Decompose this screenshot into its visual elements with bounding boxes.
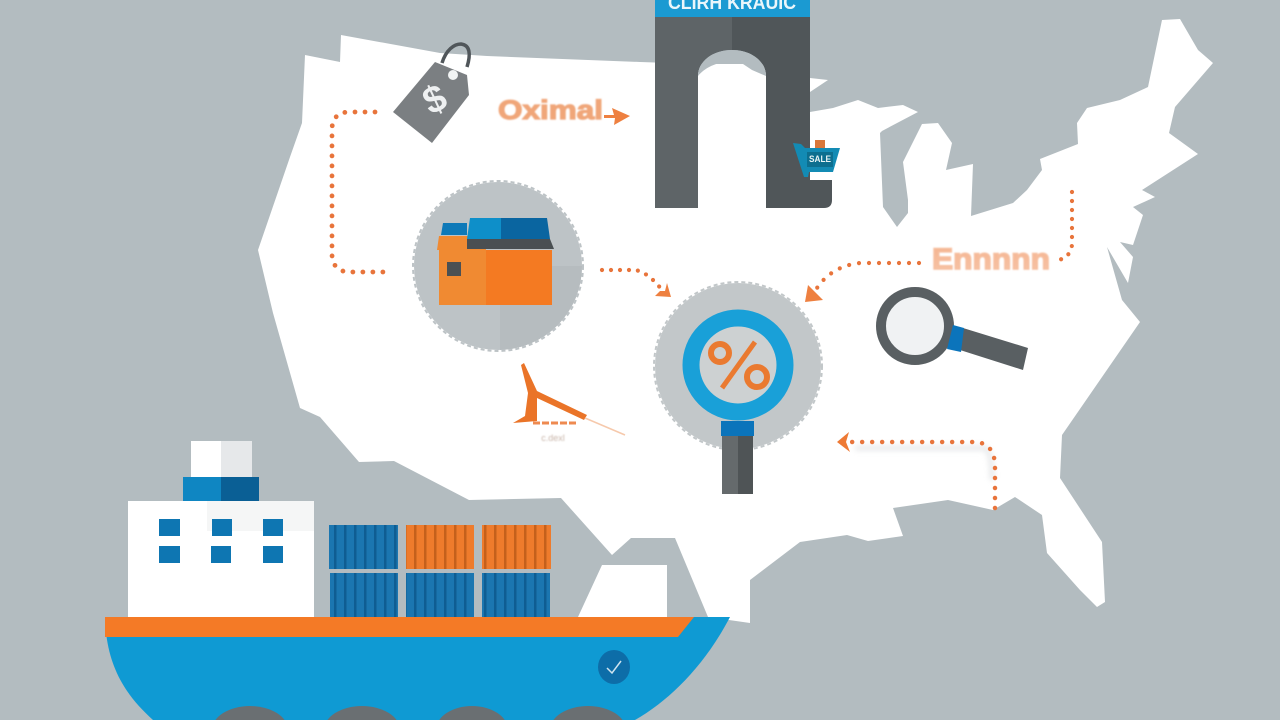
containers bottom row [330, 573, 550, 617]
porthole 2 [324, 706, 400, 720]
magnifier lens [881, 292, 949, 360]
route shadow [855, 448, 992, 480]
arrow [604, 108, 630, 125]
ship funnel right [221, 441, 252, 477]
warehouse left side [439, 236, 486, 305]
percent slash [722, 342, 755, 388]
circle jagged edge [413, 181, 583, 351]
ship orange deck stripe [105, 617, 694, 637]
lens collar [721, 421, 754, 436]
cart label [807, 152, 833, 167]
cart label text: SALE [809, 154, 831, 164]
tag body [393, 62, 469, 143]
label text: Ennnnn [932, 243, 1050, 276]
map of the United States [258, 19, 1213, 623]
icon: price tag [393, 44, 469, 143]
warehouse left gable [437, 236, 465, 250]
porthole 1 [212, 706, 288, 720]
container orange middle [406, 525, 474, 569]
cart basket [793, 143, 840, 177]
crane caption: c.dexl [541, 433, 565, 443]
crane boom line [585, 418, 625, 435]
arrow head [805, 285, 823, 302]
dotted arrow: coast to gauge [837, 432, 995, 508]
circle shaded quarter [500, 266, 582, 350]
ship funnel band right [221, 477, 259, 501]
porthole 4 [550, 706, 626, 720]
arch banner [655, 0, 810, 17]
label with arrow: top [498, 95, 630, 125]
icon: crane [513, 363, 625, 443]
cargo ship [105, 441, 730, 720]
arch right leg [732, 17, 832, 208]
arrow head [655, 283, 671, 297]
route dots [852, 442, 995, 508]
icon: magnifying glass [881, 292, 1028, 370]
arrow head [837, 432, 850, 452]
container blue middle [406, 573, 474, 617]
magnifier handle [960, 328, 1028, 370]
ship windows [159, 519, 283, 563]
percent first ring [711, 344, 729, 362]
dotted arrow: warehouse to gauge [602, 270, 671, 297]
route glow [338, 125, 342, 255]
ship bow cabin [578, 565, 667, 617]
icon: shopping cart [793, 140, 840, 177]
ship funnel band left [183, 477, 221, 501]
ship funnel left [191, 441, 221, 477]
crane body [513, 363, 587, 423]
lens ring [691, 318, 785, 412]
warehouse body [439, 250, 552, 305]
container blue left [330, 573, 398, 617]
crane dashes [533, 422, 577, 424]
tag dollar sign: $ [417, 77, 453, 123]
ship portholes [212, 706, 626, 720]
ship badge check mark [607, 661, 621, 673]
warehouse small blue roof [441, 223, 467, 235]
label with dotted route: right [805, 192, 1072, 302]
container blue top [329, 525, 398, 569]
handle left [722, 436, 738, 494]
label text: Oximal [498, 95, 603, 125]
warehouse dark roof band [467, 239, 554, 249]
route dots left [817, 263, 919, 288]
arch opening shadow [698, 50, 766, 76]
lens fill [698, 325, 778, 405]
cart item [815, 140, 825, 148]
warehouse main roof right [501, 218, 550, 239]
ship superstructure shade [207, 501, 314, 531]
gauge background [655, 283, 821, 449]
ship hull badge [598, 650, 630, 684]
container orange right [482, 525, 551, 569]
dotted route: tag to warehouse [332, 112, 390, 272]
warehouse main roof left [467, 218, 501, 239]
tag loop [442, 44, 469, 67]
magnifier collar [947, 325, 964, 352]
containers top row [329, 525, 551, 569]
porthole 3 [436, 706, 508, 720]
route dots up [1058, 192, 1072, 260]
percent second ring [747, 367, 767, 387]
percent symbol [711, 342, 767, 388]
gauge jagged edge [654, 282, 822, 450]
window row 2 [159, 546, 283, 563]
panel: warehouse circle [413, 181, 583, 351]
archway building [655, 0, 832, 208]
ship hull [105, 617, 730, 720]
window row 1 [159, 519, 283, 536]
container blue right [482, 573, 550, 617]
arch left leg [655, 17, 732, 208]
handle right [738, 436, 753, 494]
ship superstructure [128, 501, 314, 617]
panel: percent gauge [654, 282, 822, 494]
route dots [602, 270, 662, 290]
tag hole [448, 70, 458, 80]
circle background [414, 182, 582, 350]
route dots [332, 112, 390, 272]
warehouse window [447, 262, 461, 276]
